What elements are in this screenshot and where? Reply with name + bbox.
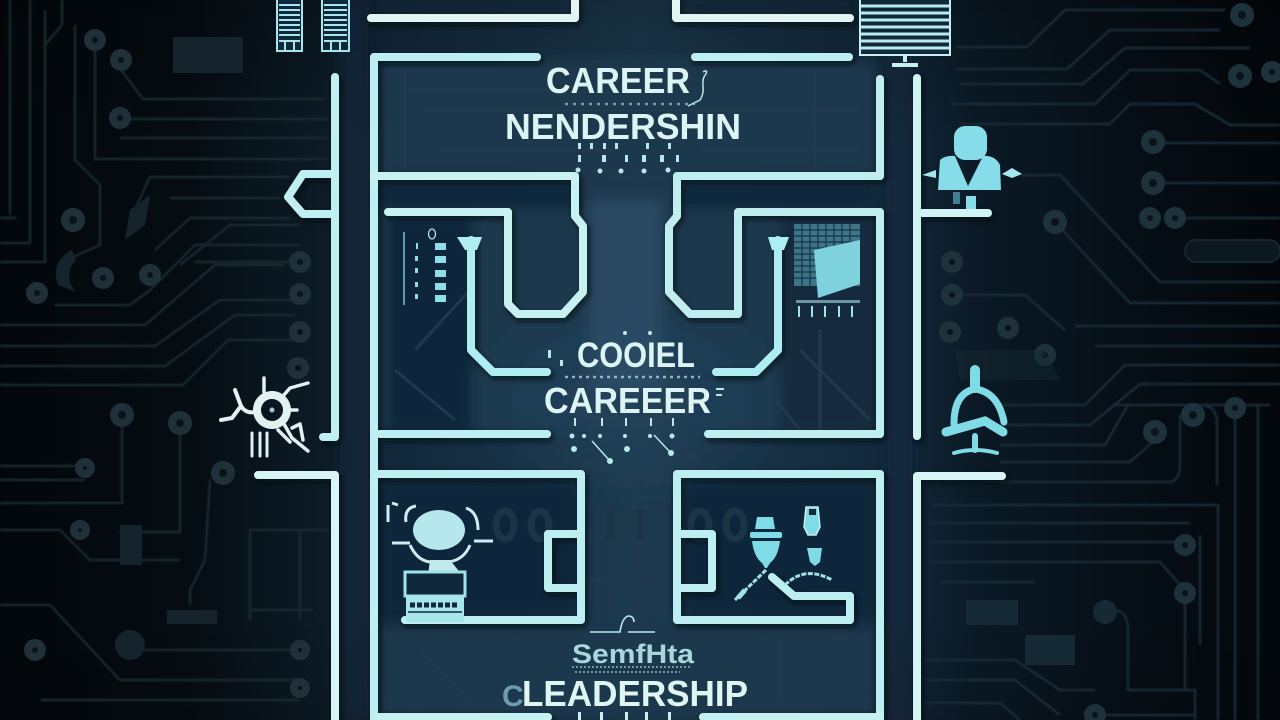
circuit traces left [0, 0, 330, 700]
blocks right [955, 240, 1280, 665]
heading: cooiel: COOIEL [577, 336, 695, 375]
top bracket right [676, 0, 850, 18]
top bar right [695, 53, 849, 61]
heading: scrambled label: SemfHta [572, 639, 695, 669]
bottom bars [378, 713, 880, 720]
heading: career: CAREER [546, 60, 690, 101]
heading: nendership: NENDERSHIN [505, 106, 741, 147]
scrambled label details [572, 616, 690, 672]
T caps [457, 237, 789, 250]
dotted caption around middle heading [548, 331, 724, 464]
lower right box [677, 474, 880, 620]
circuit pads right [943, 7, 1279, 720]
circuit pads left [28, 33, 307, 694]
heading: leadership: LEADERSHIP [522, 673, 748, 714]
outer right wall [917, 78, 988, 436]
upper right channel [669, 79, 880, 434]
right wall [876, 474, 884, 720]
heading: careeer: CAREEER [544, 380, 711, 421]
outer right wall lower [917, 476, 1002, 720]
icon: bell [946, 370, 1004, 453]
main left wall [374, 57, 537, 720]
icon: monitor [860, 0, 950, 65]
icon: server right [322, 0, 349, 51]
blocks left [56, 37, 243, 660]
icon: two figures [735, 507, 832, 600]
icon: chip grid [794, 224, 860, 317]
icon: head on computer [388, 503, 493, 622]
lower left box [374, 474, 581, 620]
circuit traces right [925, 10, 1280, 720]
icon: data columns left panel [404, 229, 446, 305]
dim pattern row in lower boxes [496, 510, 744, 540]
dim initial: C [502, 680, 524, 713]
icon: virus node [221, 378, 308, 456]
icon: person [922, 126, 1022, 209]
outer left wall lower [258, 475, 335, 720]
inner right connector [716, 240, 778, 372]
outer left wall upper [288, 77, 335, 437]
icon: server left [277, 0, 302, 51]
upper left channel [374, 176, 583, 314]
central faint traces [395, 70, 870, 700]
dots under leadership [578, 712, 671, 720]
maze lines [258, 0, 1002, 720]
top bracket left [371, 0, 575, 18]
mid row floor [380, 430, 547, 438]
inner left connector [471, 240, 547, 372]
central panel background [340, 0, 912, 720]
dotted caption under first heading [565, 71, 707, 174]
